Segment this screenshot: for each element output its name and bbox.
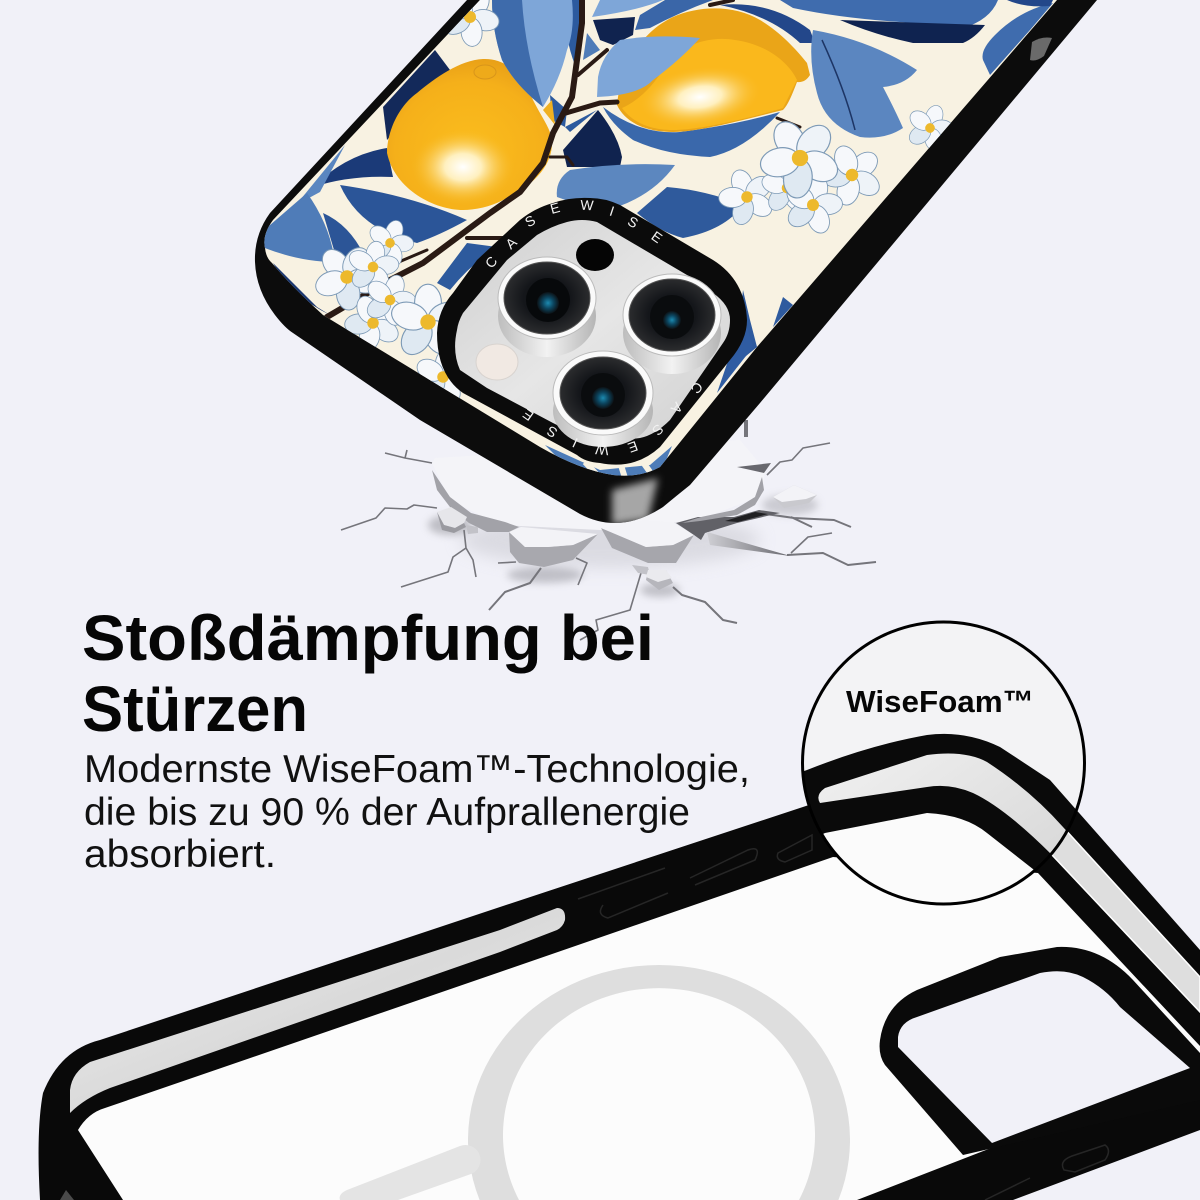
CASEWISE lettering: E	[626, 438, 640, 456]
branches	[327, 0, 800, 317]
description text: Modernste WiseFoam™-Technologie,	[84, 748, 750, 791]
flash LED	[476, 344, 518, 380]
camera island	[437, 197, 747, 465]
small lemon sliver	[543, 100, 555, 125]
CASEWISE lettering: C	[482, 253, 500, 271]
side buttons	[578, 835, 1108, 1200]
lemon left	[387, 59, 552, 210]
cracked ground impact	[341, 420, 876, 640]
camera cutout	[898, 971, 1190, 1143]
leaves	[262, 0, 1053, 480]
lemon right	[617, 8, 810, 135]
CASEWISE lettering: E	[649, 228, 665, 246]
magnifier fill	[802, 622, 1084, 904]
open clear case frame	[39, 740, 1200, 1200]
case outer bumper	[255, 0, 1097, 523]
side button on bumper	[1030, 38, 1052, 60]
CASEWISE lettering: W	[580, 197, 595, 213]
CASEWISE lettering: A	[667, 399, 686, 417]
magnifier outline	[802, 622, 1084, 904]
lemon artwork	[250, 0, 1100, 490]
magnified frame corner	[804, 734, 1076, 870]
flash hole	[576, 239, 614, 271]
black frame silhouette	[39, 740, 1200, 1200]
lens two	[623, 274, 721, 374]
CASEWISE lettering: S	[649, 421, 667, 439]
description text: absorbiert.	[84, 833, 276, 876]
CASEWISE lettering: E	[520, 406, 536, 424]
MagSafe ring	[468, 965, 850, 1200]
lens one	[498, 257, 596, 357]
camera cutout band	[880, 947, 1200, 1155]
camera plate	[455, 220, 730, 442]
description text	[84, 748, 750, 876]
CASEWISE lettering: S	[625, 213, 641, 231]
CASEWISE lettering: S	[522, 212, 538, 230]
camera bumper ring	[437, 198, 747, 465]
heading: Stürzen	[82, 673, 308, 745]
heading: Stoßdämpfung bei	[82, 602, 654, 674]
WiseFoam magnifier callout	[801, 620, 1086, 906]
CASEWISE lettering: I	[570, 435, 580, 451]
CASEWISE lettering: C	[688, 379, 706, 397]
CASEWISE lettering: S	[544, 423, 560, 441]
lens three	[553, 351, 653, 447]
blossoms	[299, 0, 962, 411]
leaf over right lemon	[597, 36, 700, 97]
CASEWISE lettering: W	[594, 441, 609, 459]
description text: die bis zu 90 % der Aufprallenergie	[84, 791, 690, 834]
case corner highlight	[612, 478, 658, 525]
CASEWISE lettering: A	[502, 233, 520, 252]
MagSafe pill	[340, 1145, 481, 1200]
clear back panel	[78, 857, 1200, 1200]
foam gap left	[70, 908, 565, 1113]
CASEWISE lettering: E	[548, 199, 562, 217]
heading	[82, 602, 654, 745]
foam gap right	[1052, 827, 1200, 1012]
WiseFoam label: WiseFoam™	[846, 684, 1034, 719]
small port	[60, 1190, 74, 1200]
CASEWISE lettering	[482, 197, 706, 459]
phone case with lemon design	[250, 0, 1100, 525]
leaf over left lemon	[492, 0, 573, 107]
CASEWISE lettering: I	[608, 203, 616, 219]
